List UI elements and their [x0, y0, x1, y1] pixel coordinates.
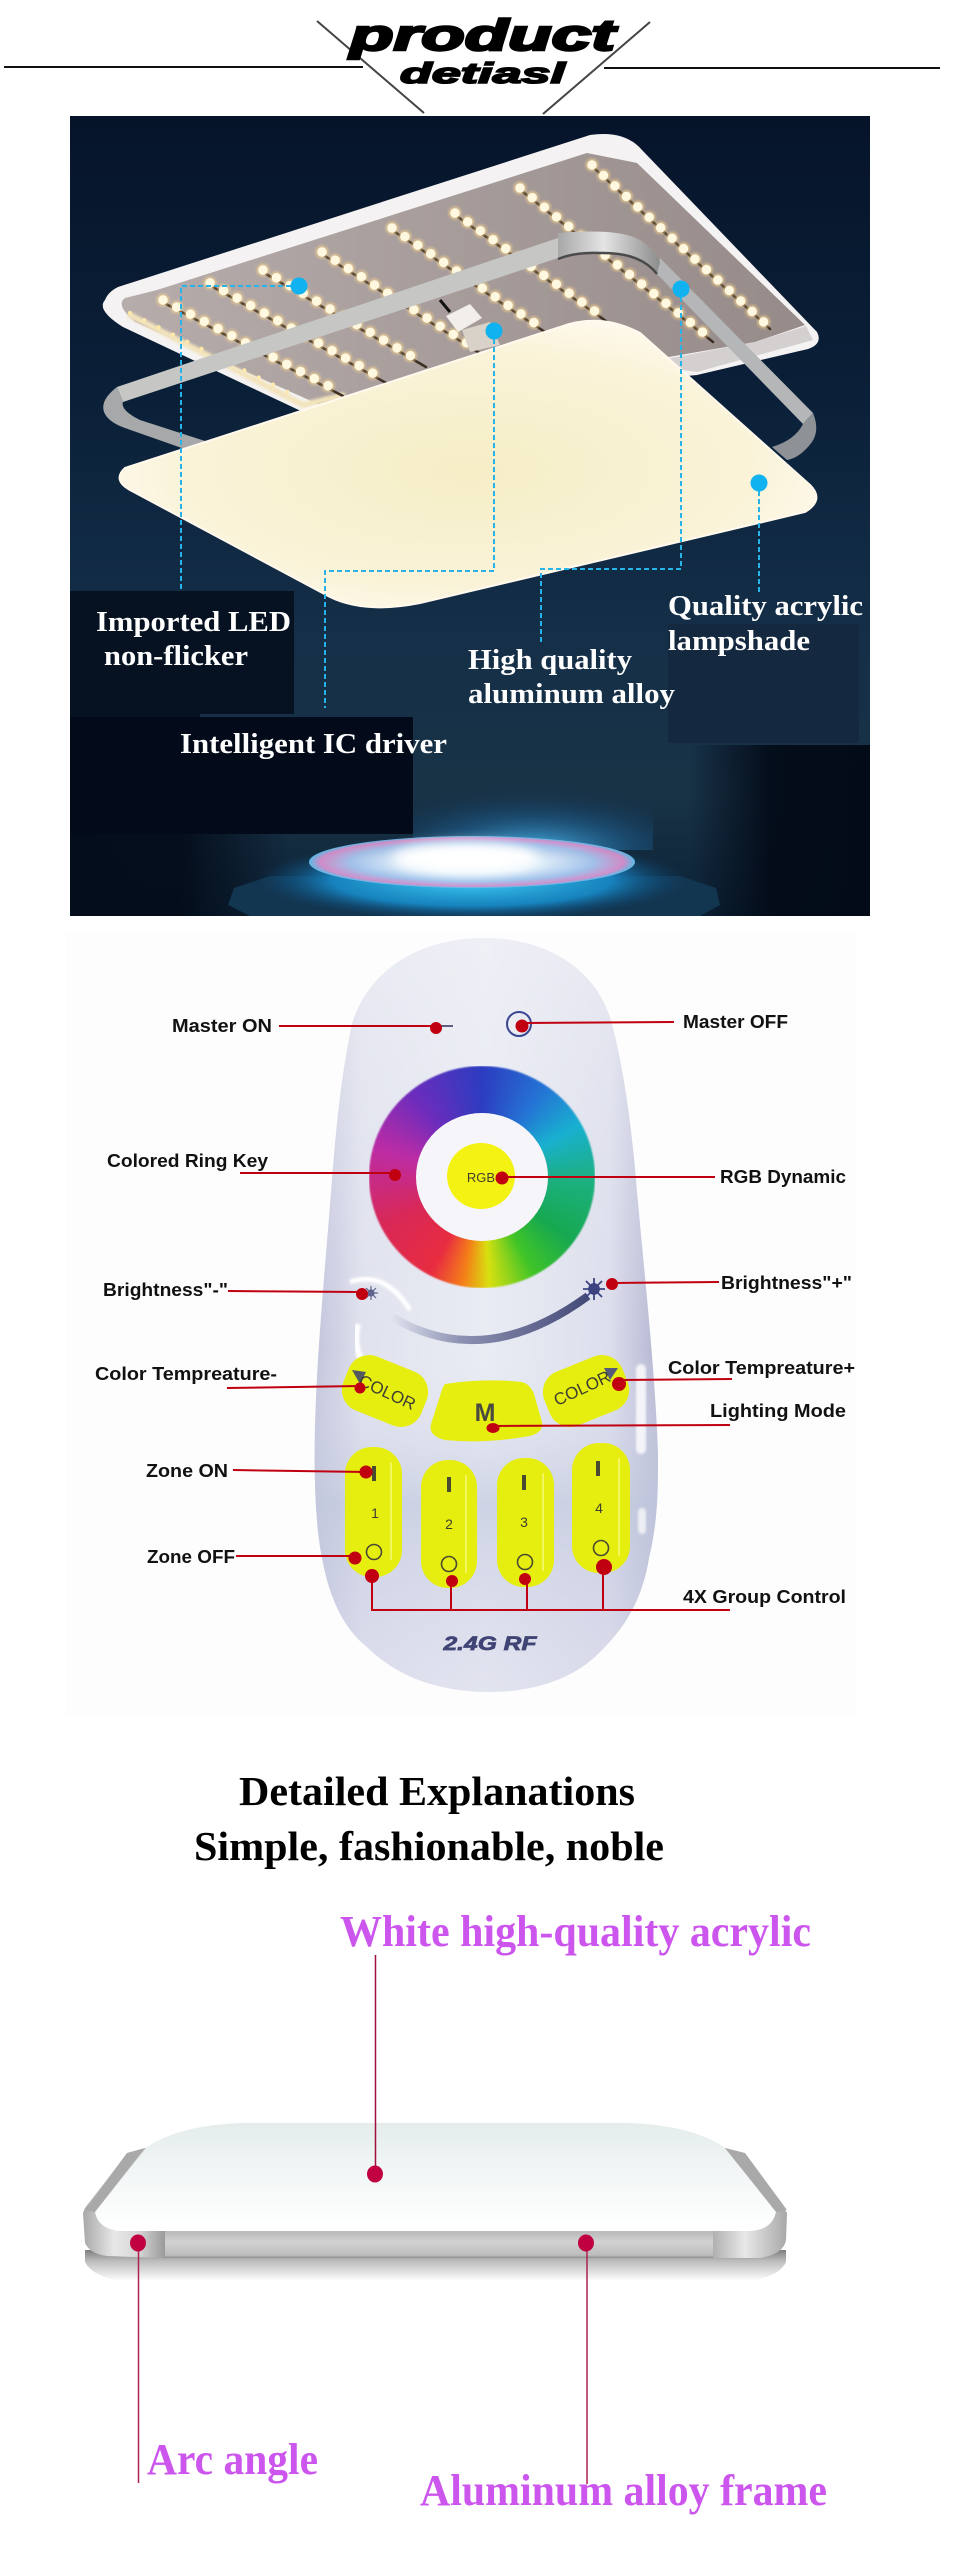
remote labels	[95, 1012, 855, 1607]
label: High quality aluminum alloy	[468, 644, 676, 710]
light beam	[413, 798, 653, 850]
brightness minus icon	[364, 1286, 378, 1300]
leader: acrylic lampshade	[750, 474, 768, 594]
header: product details	[4, 11, 940, 114]
label: White high-quality acrylic: White high-quality acrylic	[340, 1907, 811, 1956]
RGB button	[447, 1143, 515, 1209]
zone button 1: 1	[371, 1505, 379, 1521]
callout: arc angle	[130, 2234, 146, 2483]
aluminum frame	[103, 232, 816, 460]
zone button 3: 3	[520, 1514, 528, 1530]
leader: IC driver	[325, 322, 502, 708]
lamp side view	[83, 2123, 787, 2281]
label: Quality acrylic lampshade	[668, 590, 863, 657]
label: Quality acrylic lampshade: Quality acrylic	[668, 590, 863, 622]
zone button 3	[497, 1458, 554, 1587]
button: color minus: COLOR	[356, 1371, 419, 1414]
acrylic top	[95, 2123, 776, 2231]
brightness slider	[350, 1279, 588, 1340]
reflection	[85, 2250, 786, 2281]
panel: remote control backdrop	[66, 932, 857, 1715]
master on mark	[429, 1025, 453, 1027]
remote labels: Color Tempreature+	[668, 1358, 855, 1378]
remote labels: Zone OFF	[147, 1547, 235, 1567]
zone button 2	[421, 1460, 477, 1588]
label: Imported LED	[97, 611, 290, 666]
frame diagonal edges	[85, 2148, 787, 2212]
remote labels: Color Tempreature-	[95, 1364, 277, 1384]
button: color plus: COLOR	[551, 1367, 614, 1410]
lamp back plate	[103, 134, 819, 412]
zone button 4: 4	[595, 1500, 603, 1516]
label backing boxes	[70, 591, 859, 834]
callout: acrylic	[367, 1955, 383, 2182]
colored ring	[369, 1066, 595, 1288]
label: Imported LED: Imported LED	[96, 606, 291, 638]
button: M	[431, 1380, 542, 1441]
heading: Detailed Explanations: Simple, fashionable, noble	[194, 1823, 664, 1869]
zone button 1	[345, 1447, 402, 1577]
remote body	[315, 938, 658, 1692]
LED strips	[130, 165, 770, 398]
label: High quality aluminum alloy: High quality	[468, 644, 633, 676]
remote labels: 4X Group Control	[683, 1587, 846, 1607]
label: Intelligent IC driver: Intelligent IC driver	[180, 728, 447, 760]
RGB button: RGB	[467, 1170, 495, 1185]
brightness plus icon	[583, 1278, 605, 1300]
ring centre	[416, 1113, 548, 1241]
remote control	[315, 938, 658, 1692]
label: Imported LED: non-flicker	[104, 640, 248, 672]
master off mark	[507, 1012, 531, 1036]
projector platform	[228, 876, 720, 916]
title word: detiasl: detiasl	[400, 58, 567, 90]
remote labels: Zone ON	[146, 1461, 228, 1481]
aluminum frame	[83, 2148, 787, 2258]
callouts: remote control	[227, 1022, 732, 1610]
driver module	[440, 300, 500, 352]
callout: aluminum alloy frame	[578, 2234, 594, 2484]
label: Quality acrylic lampshade: lampshade	[668, 625, 810, 657]
zone button 2: 2	[445, 1516, 453, 1532]
remote labels: RGB Dynamic	[720, 1167, 846, 1187]
heading: Detailed Explanations: Detailed Explanations	[239, 1768, 635, 1814]
leader: imported LED	[181, 278, 308, 591]
title word: product: product	[348, 11, 619, 60]
label: Aluminum alloy frame: Aluminum alloy frame	[420, 2466, 827, 2515]
remote labels: Master ON	[172, 1016, 272, 1036]
callout dots	[348, 1020, 626, 1587]
leader: aluminum alloy	[541, 280, 690, 645]
remote labels: Master OFF	[683, 1012, 788, 1032]
button: color minus	[335, 1348, 435, 1434]
heading: Detailed Explanations	[194, 1768, 664, 1869]
zone button 4	[572, 1443, 630, 1573]
remote labels: Brightness"-"	[103, 1280, 228, 1300]
remote labels: Colored Ring Key	[107, 1151, 268, 1171]
dark corner shading	[70, 745, 870, 916]
2.4G RF mark: 2.4G RF	[442, 1634, 538, 1655]
label: Arc angle: Arc angle	[147, 2435, 318, 2484]
panel: exploded lamp view	[70, 116, 870, 920]
frame centre band	[165, 2231, 713, 2258]
remote labels: Lighting Mode	[710, 1401, 846, 1421]
acrylic lampshade	[120, 321, 816, 607]
button: color plus	[536, 1348, 636, 1434]
light glow	[257, 836, 687, 920]
label: High quality aluminum alloy: aluminum alloy	[468, 678, 676, 710]
button: M: M	[475, 1399, 495, 1427]
remote labels: Brightness"+"	[721, 1273, 852, 1293]
